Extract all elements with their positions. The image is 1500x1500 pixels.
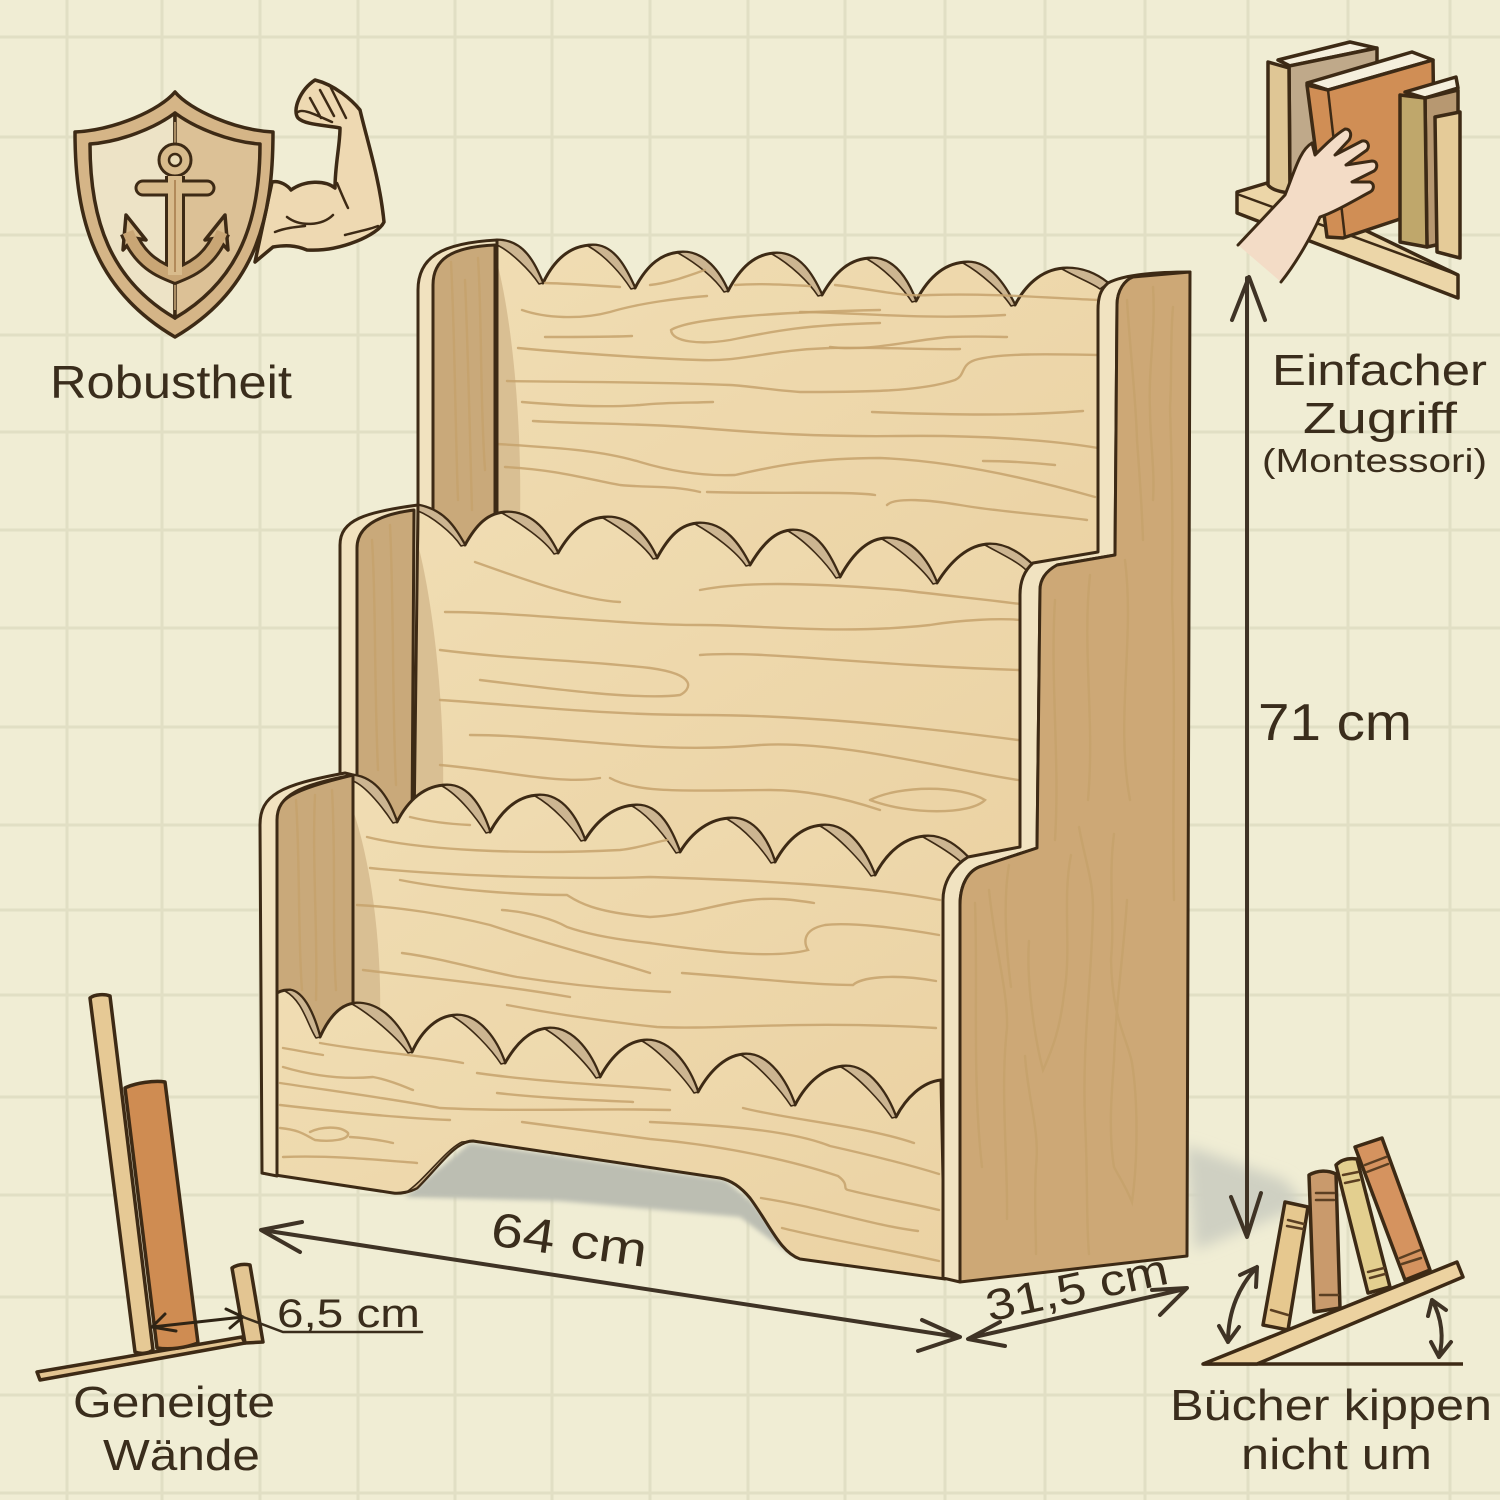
- lower tier left end wall: [277, 775, 353, 1045]
- icon: book 1: [1263, 1202, 1308, 1330]
- icon: olive book: [1400, 77, 1458, 247]
- icon: reaching hand: [1238, 129, 1377, 282]
- icon: book between walls: [125, 1081, 198, 1349]
- leader and underline: [243, 1317, 422, 1332]
- icon: long tilted wall: [90, 995, 153, 1353]
- gap arrow: [152, 1309, 243, 1331]
- front panel with scalloped edge: [262, 990, 945, 1279]
- label: 71 cm: 71 cm: [1258, 694, 1412, 752]
- label: Einfacher: Einfacher: [1272, 346, 1487, 395]
- depth dimension arrow: 31,5 cm: [968, 1245, 1187, 1346]
- tilt arrow left: [1219, 1267, 1257, 1342]
- icon: short front wall: [232, 1264, 263, 1343]
- floor shadow under the shelf: [405, 1143, 1305, 1258]
- icon: ground line: [1203, 1362, 1463, 1366]
- feature: Einfacher Zugriff: [1237, 42, 1487, 479]
- icon: tan book: [1268, 42, 1377, 200]
- icon: book bands: [1271, 1157, 1421, 1315]
- label: (Montessori): (Montessori): [1262, 442, 1487, 479]
- label: Robustheit: Robustheit: [50, 356, 292, 408]
- icon: shield: [75, 92, 273, 337]
- label: nicht um: nicht um: [1241, 1430, 1432, 1479]
- right side panel with stepped edge: [960, 272, 1190, 1282]
- icon: anchor: [123, 144, 228, 276]
- icon: tilted base board: [37, 1337, 245, 1380]
- icon: book 3: [1336, 1159, 1390, 1293]
- tilt arrow right: [1428, 1300, 1451, 1357]
- label: Wände: Wände: [103, 1431, 260, 1480]
- icon: orange book: [1307, 52, 1435, 238]
- feature: Geneigte Wände: [37, 995, 422, 1480]
- right side plywood edge strip: [943, 272, 1190, 1282]
- icon: tilted board: [1203, 1262, 1463, 1364]
- icon: shelf board: [1237, 183, 1458, 298]
- feature: Robustheit: [50, 80, 384, 408]
- lower tier panel: [353, 775, 968, 1125]
- feature: Bücher kippen nicht um: [1170, 1138, 1492, 1479]
- icon: book 2: [1309, 1171, 1340, 1312]
- label: Bücher kippen: Bücher kippen: [1170, 1381, 1492, 1430]
- middle tier panel: [414, 505, 1033, 880]
- top tier back panel: [497, 240, 1108, 620]
- icon: flexing arm: [255, 80, 384, 262]
- label: Zugriff: Zugriff: [1303, 394, 1458, 443]
- height dimension arrow: 71 cm: [1231, 277, 1412, 1237]
- middle tier left end wall: [340, 505, 418, 830]
- width dimension arrow: 64 cm: [261, 1203, 960, 1351]
- icon: cream book: [1435, 112, 1460, 258]
- wooden book shelf: [260, 240, 1190, 1282]
- label: 6,5 cm: 6,5 cm: [277, 1292, 420, 1336]
- icon: book 4: [1355, 1138, 1430, 1280]
- label: Geneigte: Geneigte: [73, 1378, 275, 1427]
- top tier left end wall: [418, 240, 497, 545]
- label: 64 cm: 64 cm: [488, 1203, 651, 1278]
- left plywood edge strip: [260, 773, 353, 1176]
- label: 31,5 cm: 31,5 cm: [981, 1245, 1173, 1331]
